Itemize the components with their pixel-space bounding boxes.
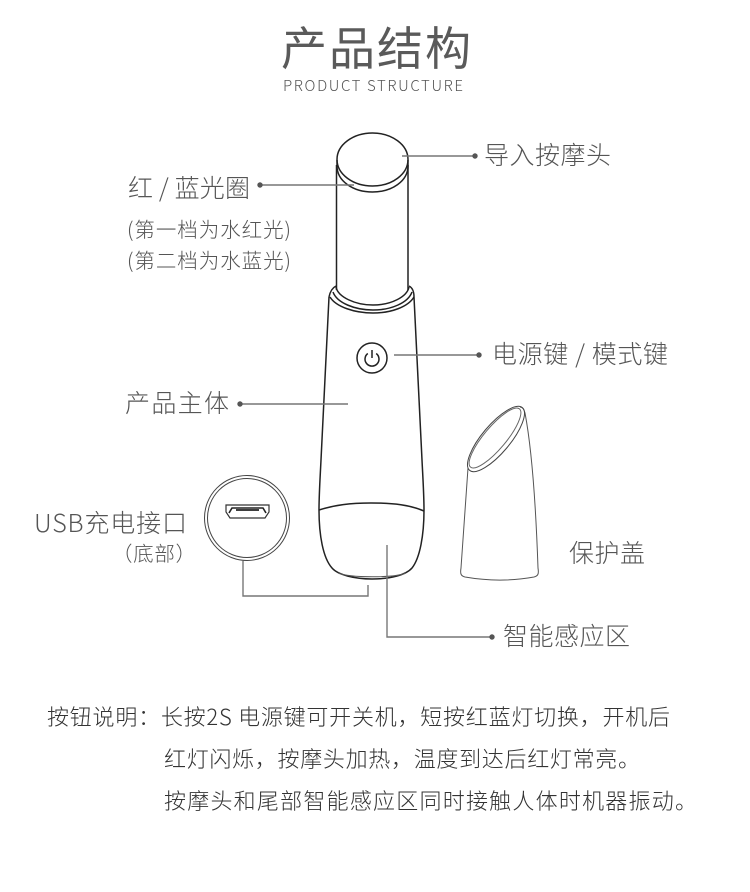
button description <box>47 700 697 816</box>
button description: 按摩头和尾部智能感应区同时接触人体时机器振动。 <box>164 784 697 816</box>
leader: massage head <box>402 155 475 157</box>
label: massage head: 导入按摩头 <box>484 136 611 172</box>
title: 产品结构 <box>281 13 471 79</box>
label: usb charging: （底部） <box>112 537 196 567</box>
label: usb charging <box>34 504 196 567</box>
protective cap <box>459 399 538 580</box>
label: red blue ring: (第一档为水红光) <box>127 213 291 243</box>
leader: power key <box>394 354 478 356</box>
leader: main body <box>240 403 348 405</box>
button description: 按钮说明：长按2S 电源键可开关机，短按红蓝灯切换，开机后 <box>47 700 670 732</box>
label: red blue ring: 红 / 蓝光圈 <box>128 169 250 205</box>
sensing zone band <box>319 503 424 511</box>
power button <box>357 343 387 373</box>
USB port detail <box>204 476 290 560</box>
leader: sensing zone <box>387 545 491 637</box>
label: red blue ring: (第二档为水蓝光) <box>127 244 291 274</box>
label: main body: 产品主体 <box>125 384 229 420</box>
label: power key: 电源键 / 模式键 <box>492 335 668 371</box>
base ring <box>338 573 406 577</box>
collar <box>329 286 414 313</box>
upper tube <box>336 165 408 290</box>
label: usb charging: USB充电接口 <box>34 504 187 540</box>
icon: usb connector <box>226 505 269 518</box>
label: protective cap: 保护盖 <box>569 534 645 570</box>
leader: usb <box>243 561 368 596</box>
title: PRODUCT STRUCTURE <box>283 75 463 96</box>
main body <box>319 297 424 579</box>
label: sensing zone: 智能感应区 <box>503 617 630 653</box>
button description: 红灯闪烁，按摩头加热，温度到达后红灯常亮。 <box>164 742 640 774</box>
device illustration <box>319 133 424 579</box>
leader: red blue ring <box>260 184 354 186</box>
massage head <box>337 133 408 192</box>
label: red blue ring <box>127 169 291 274</box>
